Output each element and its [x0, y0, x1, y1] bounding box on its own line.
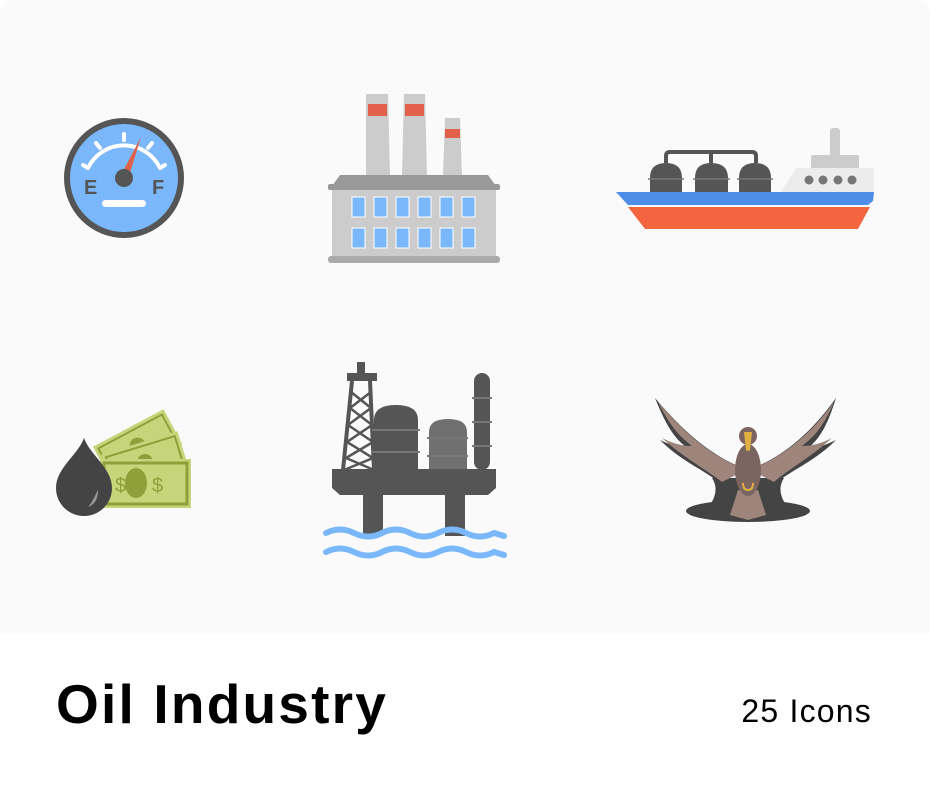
icon: factory — [328, 94, 500, 263]
title: Oil Industry — [56, 673, 388, 735]
icon: oil-covered eagle — [655, 398, 836, 522]
icon: offshore oil rig — [326, 362, 504, 556]
icon: fuel gauge: E — [84, 177, 97, 199]
icon count: 25 Icons — [741, 693, 872, 729]
icon: fuel gauge — [67, 121, 181, 235]
icon: oil drop and money — [56, 409, 191, 516]
icon: oil drop and money: $ — [115, 475, 126, 497]
icon: oil drop and money: $ — [152, 475, 163, 497]
icon: tanker ship — [616, 128, 874, 229]
icon: fuel gauge: F — [152, 177, 164, 199]
